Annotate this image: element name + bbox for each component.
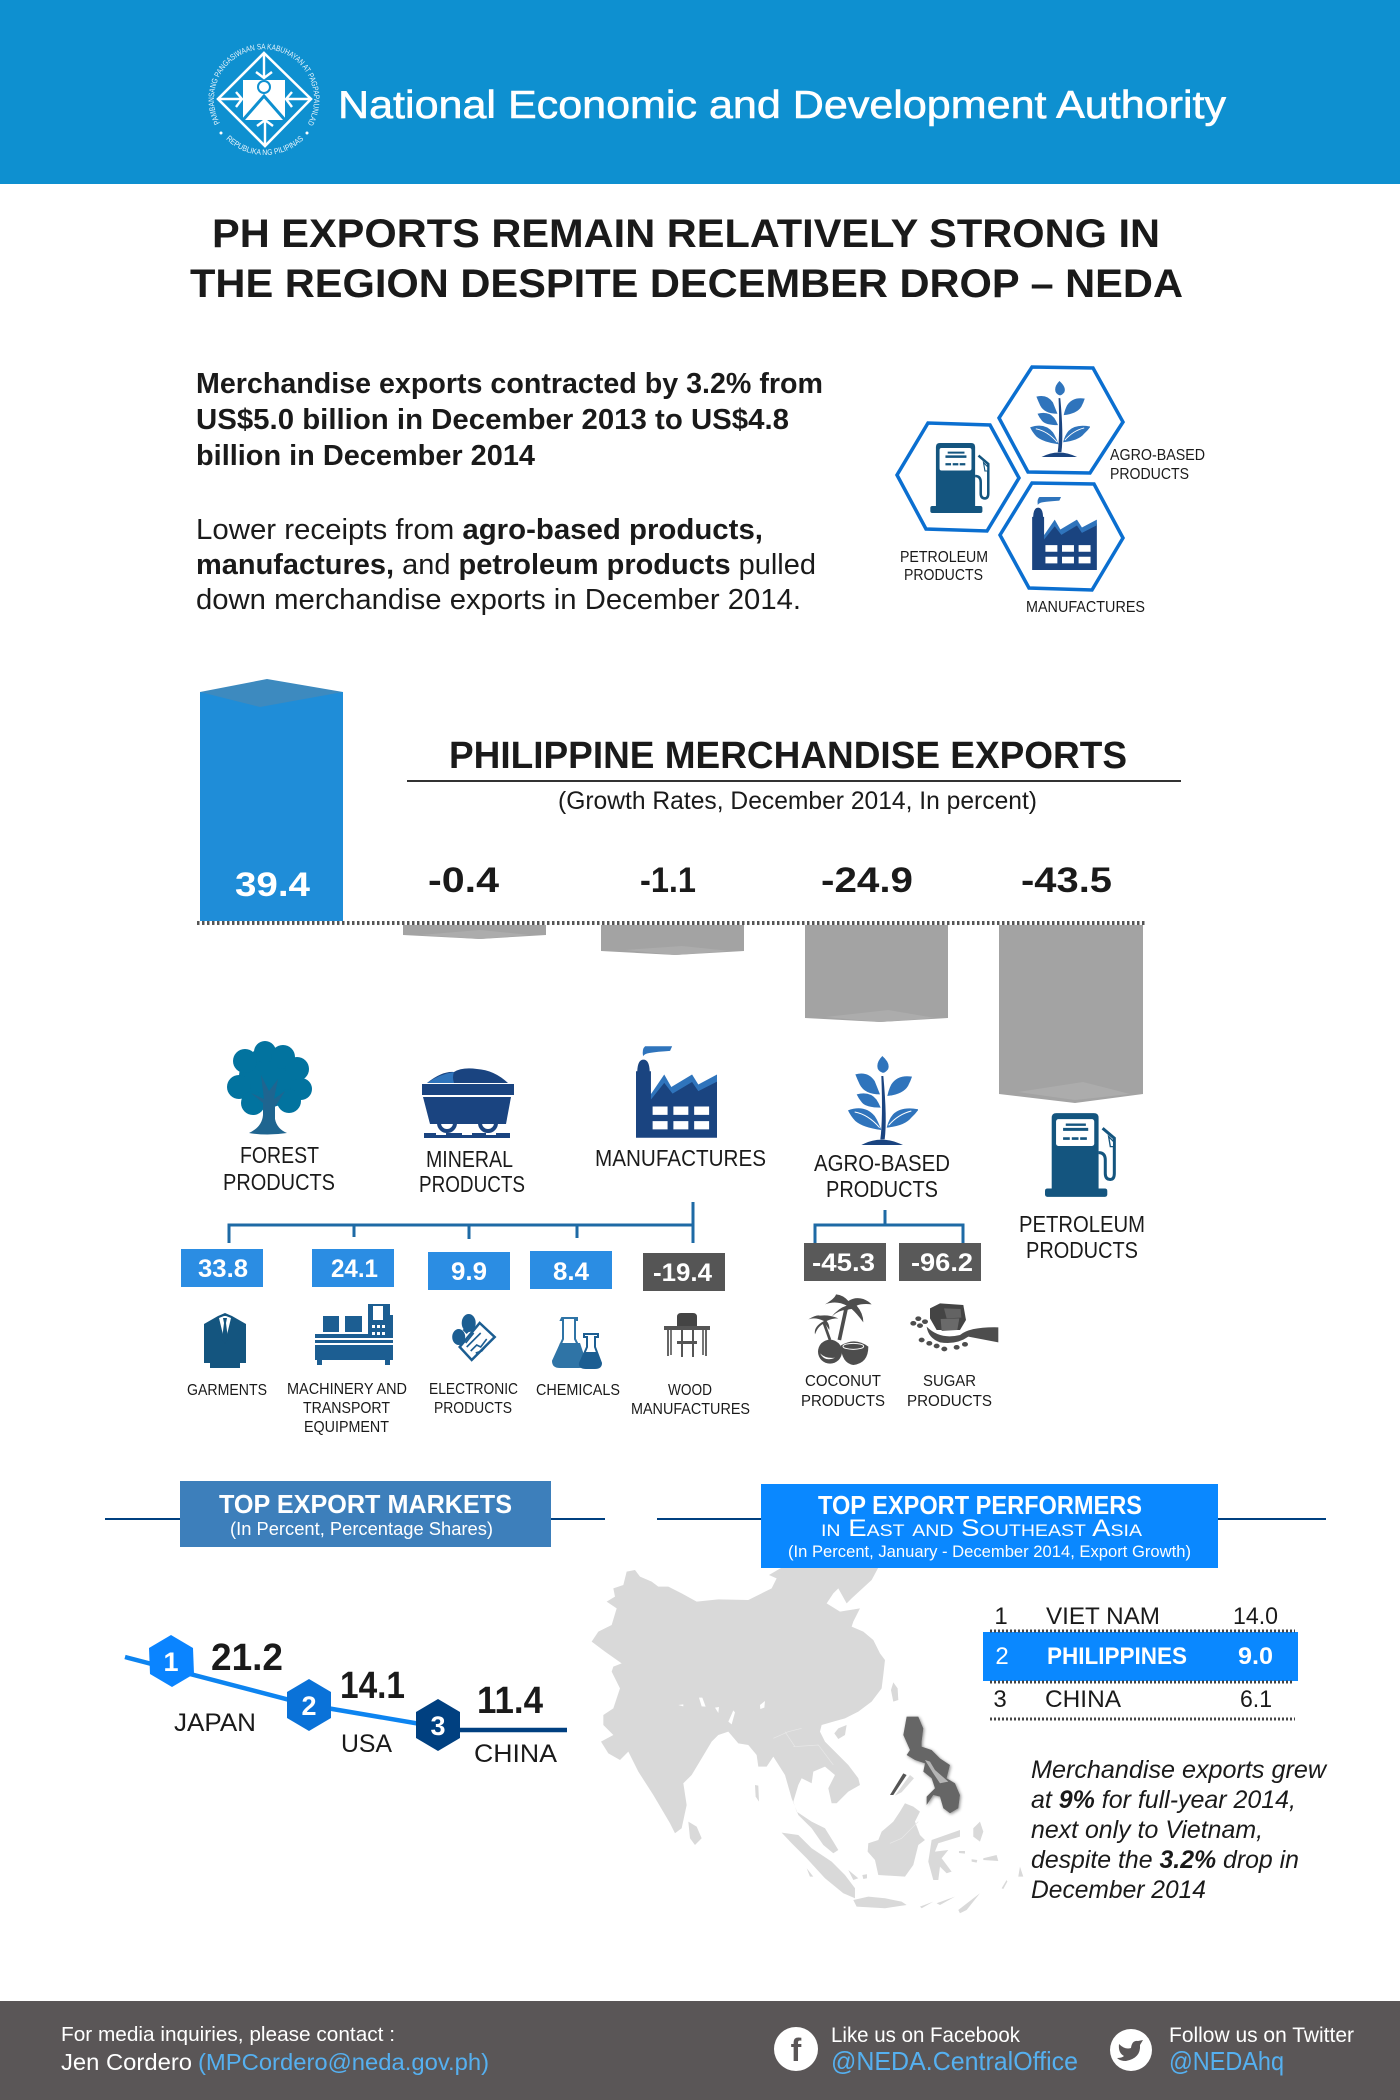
footer twitter text xyxy=(1169,2024,1354,2076)
manufactures sub-labels: WOOD xyxy=(668,1382,712,1399)
icon: plant xyxy=(848,1056,919,1145)
manufactures sub-labels: TRANSPORT xyxy=(303,1400,390,1417)
bar: forest products 39.4 xyxy=(200,679,343,921)
forest products label xyxy=(223,1142,335,1195)
market values: 14.1 xyxy=(340,1665,405,1707)
footer twitter text: @NEDAhq xyxy=(1169,2046,1284,2076)
icon: machinery xyxy=(315,1304,393,1365)
ranked markets line chart xyxy=(125,1635,567,1768)
row: Viet Nam: VIET NAM xyxy=(1046,1603,1160,1630)
mineral products label xyxy=(419,1146,525,1197)
map of East and Southeast Asia xyxy=(592,1568,1023,1913)
value box: electronics: 9.9 xyxy=(451,1258,487,1286)
hexagon labels: AGRO-BASED xyxy=(1110,447,1205,464)
bar values: -0.4 xyxy=(428,861,500,900)
icon: electronics chip xyxy=(452,1314,495,1360)
intro body text xyxy=(196,514,816,616)
hexagon labels: PETROLEUM xyxy=(900,549,988,566)
footer media contact: Jen Cordero xyxy=(61,2049,192,2075)
market values xyxy=(211,1637,543,1722)
hexagon: manufactures xyxy=(1000,483,1123,590)
intro body text: down merchandise exports in December 2014. xyxy=(196,584,801,616)
value box: electronics xyxy=(428,1252,510,1290)
manufactures sub-labels: GARMENTS xyxy=(187,1382,267,1399)
bar values: -1.1 xyxy=(640,861,696,900)
bar: forest products 39.4: 39.4 xyxy=(235,866,310,904)
italic callout text: Merchandise exports grew xyxy=(1031,1756,1328,1784)
hexagon icon cluster xyxy=(897,367,1205,616)
icon: wood chair and desk xyxy=(664,1313,710,1357)
header organisation name: National Economic and Development Authority xyxy=(338,84,1227,127)
row: Philippines highlighted: PHILIPPINES xyxy=(1047,1643,1187,1670)
footer media contact: (MPCordero@neda.gov.ph) xyxy=(198,2049,489,2075)
chart heading xyxy=(407,735,1181,815)
forest products label: PRODUCTS xyxy=(223,1169,335,1195)
intro bold text: US$5.0 billion in December 2013 to US$4.8 xyxy=(196,404,789,436)
value box: machinery: 24.1 xyxy=(331,1255,378,1283)
footer facebook text: @NEDA.CentralOffice xyxy=(831,2046,1078,2076)
icon: twitter xyxy=(1110,2029,1152,2071)
agro sub-labels: PRODUCTS xyxy=(801,1393,885,1410)
row: China xyxy=(993,1686,1272,1713)
bar: petroleum -43.5 xyxy=(999,925,1143,1103)
icon: NEDA seal logo: REPUBLIKA NG PILIPINAS xyxy=(226,135,303,155)
market values: 21.2 xyxy=(211,1637,283,1679)
manufactures sub-labels xyxy=(187,1381,750,1436)
manufactures sub-labels: EQUIPMENT xyxy=(304,1419,389,1436)
section rule: top export performers xyxy=(657,1518,1326,1520)
italic callout text: next only to Vietnam, xyxy=(1031,1816,1263,1844)
icon: coconut palms xyxy=(808,1294,872,1365)
manufactures sub-labels: PRODUCTS xyxy=(434,1400,512,1417)
icon: facebook: f xyxy=(791,2032,802,2068)
hexagon: agro-based products xyxy=(999,367,1123,473)
market names: USA xyxy=(341,1730,392,1758)
chart heading: PHILIPPINE MERCHANDISE EXPORTS xyxy=(449,735,1127,777)
value box: wood manufactures xyxy=(643,1253,725,1291)
Philippines highlighted xyxy=(890,1717,960,1813)
agro sub-labels: SUGAR xyxy=(923,1373,976,1390)
footer media contact xyxy=(61,2024,489,2075)
hexagon labels xyxy=(900,447,1205,616)
value box: coconut xyxy=(804,1243,886,1281)
row: China: 6.1 xyxy=(1240,1686,1272,1713)
value box: chemicals: 8.4 xyxy=(553,1258,589,1286)
rank 3 hexagon xyxy=(416,1699,460,1751)
hexagon labels: PRODUCTS xyxy=(904,567,983,584)
rank 1 hexagon xyxy=(149,1635,194,1687)
section rule: top export markets xyxy=(105,1518,605,1520)
market values: 11.4 xyxy=(477,1680,543,1722)
rank 2 hexagon xyxy=(287,1679,331,1731)
market names xyxy=(174,1709,557,1768)
heading: top export markets: (In Percent, Percentage Shares) xyxy=(230,1519,493,1539)
title: PH EXPORTS REMAIN RELATIVELY STRONG IN xyxy=(212,212,1160,256)
icon: fuel pump xyxy=(1045,1113,1114,1197)
value box: chemicals xyxy=(530,1251,612,1289)
manufactures sub-labels: MACHINERY AND xyxy=(287,1381,407,1398)
value box: sugar: -96.2 xyxy=(911,1249,973,1277)
icon: NEDA seal logo: PAMBANSANG PANGASIWAAN SA KABUHAYAN AT PAGPAPAUNLAD xyxy=(208,44,320,126)
manufactures bracket xyxy=(229,1202,693,1243)
title xyxy=(190,212,1183,306)
rank 1 hexagon: 1 xyxy=(163,1647,179,1677)
row: Viet Nam: 14.0 xyxy=(1233,1603,1278,1630)
hexagon: petroleum products xyxy=(897,423,1019,531)
italic callout text: December 2014 xyxy=(1031,1876,1206,1904)
row: Philippines highlighted: 9.0 xyxy=(1238,1643,1273,1670)
intro bold text: Merchandise exports contracted by 3.2% from xyxy=(196,368,823,400)
heading: top export performers: (In Percent, January - December 2014, Export Growth) xyxy=(788,1542,1191,1561)
heading: top export markets xyxy=(180,1481,551,1547)
bar values xyxy=(428,861,1112,900)
manufactures sub-labels: CHEMICALS xyxy=(536,1382,620,1399)
row: Viet Nam xyxy=(994,1603,1278,1630)
bar: mineral products -0.4 xyxy=(403,925,546,939)
rank 2 hexagon: 2 xyxy=(301,1691,317,1721)
header band xyxy=(0,0,1400,184)
hexagon labels: MANUFACTURES xyxy=(1026,599,1145,616)
row: Philippines highlighted xyxy=(983,1632,1298,1681)
chart heading: (Growth Rates, December 2014, In percent) xyxy=(558,787,1037,815)
rank 3 hexagon: 3 xyxy=(430,1711,446,1741)
icon: sugar scoop xyxy=(910,1303,998,1351)
footer media contact: For media inquiries, please contact : xyxy=(61,2024,395,2046)
value box: sugar xyxy=(899,1243,981,1281)
ranking table xyxy=(983,1603,1298,1719)
bar: agro-based -24.9 xyxy=(805,925,948,1022)
market names: JAPAN xyxy=(174,1709,256,1737)
manufactures sub-labels: ELECTRONIC xyxy=(429,1381,518,1398)
footer facebook text: Like us on Facebook xyxy=(831,2024,1020,2047)
row: Philippines highlighted: 2 xyxy=(995,1643,1009,1670)
market names: CHINA xyxy=(474,1740,557,1768)
bar values: -24.9 xyxy=(821,861,913,900)
icon: tree xyxy=(227,1041,312,1134)
zero baseline xyxy=(197,921,1147,925)
petroleum products label: PETROLEUM xyxy=(1019,1211,1145,1237)
footer band xyxy=(0,2001,1400,2100)
italic callout text: at 9% for full-year 2014, xyxy=(1031,1786,1296,1814)
value box: wood manufactures: -19.4 xyxy=(653,1259,712,1287)
footer twitter text: Follow us on Twitter xyxy=(1169,2024,1354,2047)
icon: factory xyxy=(636,1046,717,1138)
italic callout text xyxy=(1031,1756,1328,1904)
petroleum products label xyxy=(1019,1211,1145,1263)
icon: mine cart xyxy=(422,1068,514,1138)
intro bold text xyxy=(196,368,823,472)
manufactures sub-labels: MANUFACTURES xyxy=(631,1401,750,1418)
bar chart xyxy=(197,679,1147,1103)
agro-based bracket xyxy=(815,1210,963,1243)
italic callout text: despite the 3.2% drop in xyxy=(1031,1846,1299,1874)
forest products label: FOREST xyxy=(240,1142,319,1168)
value box: machinery xyxy=(312,1249,394,1287)
agro sub-labels xyxy=(801,1373,992,1410)
hexagon labels: PRODUCTS xyxy=(1110,466,1189,483)
row: China: 3 xyxy=(993,1686,1007,1713)
mineral products label: PRODUCTS xyxy=(419,1171,525,1197)
mineral products label: MINERAL xyxy=(426,1146,513,1172)
intro body text: manufactures, and petroleum products pulled xyxy=(196,549,816,581)
title: THE REGION DESPITE DECEMBER DROP – NEDA xyxy=(190,262,1183,306)
heading: top export performers xyxy=(761,1484,1218,1568)
manufactures label: MANUFACTURES xyxy=(595,1145,766,1171)
row: China: CHINA xyxy=(1045,1686,1121,1713)
icon: suit xyxy=(204,1313,246,1368)
agro-based products label xyxy=(814,1150,950,1202)
agro sub-labels: PRODUCTS xyxy=(907,1393,992,1410)
agro-based products label: AGRO-BASED xyxy=(814,1150,950,1176)
heading: top export performers: TOP EXPORT PERFORMERS xyxy=(818,1490,1142,1520)
icon: facebook xyxy=(774,2027,818,2071)
petroleum products label: PRODUCTS xyxy=(1026,1237,1138,1263)
agro sub-labels: COCONUT xyxy=(805,1373,881,1390)
icon: chemical flasks xyxy=(553,1318,601,1368)
intro bold text: billion in December 2014 xyxy=(196,440,535,472)
value box: garments xyxy=(181,1249,263,1287)
footer facebook text xyxy=(831,2024,1078,2076)
value box: garments: 33.8 xyxy=(198,1255,248,1283)
bar: manufactures -1.1 xyxy=(601,925,744,955)
agro-based products label: PRODUCTS xyxy=(826,1176,938,1202)
intro body text: Lower receipts from agro-based products, xyxy=(196,514,763,546)
row: Viet Nam: 1 xyxy=(994,1603,1008,1630)
heading: top export markets: TOP EXPORT MARKETS xyxy=(219,1489,512,1519)
heading: top export performers: in East and Southeast Asia xyxy=(821,1515,1143,1542)
bar values: -43.5 xyxy=(1021,861,1112,900)
value box: coconut: -45.3 xyxy=(812,1249,875,1277)
